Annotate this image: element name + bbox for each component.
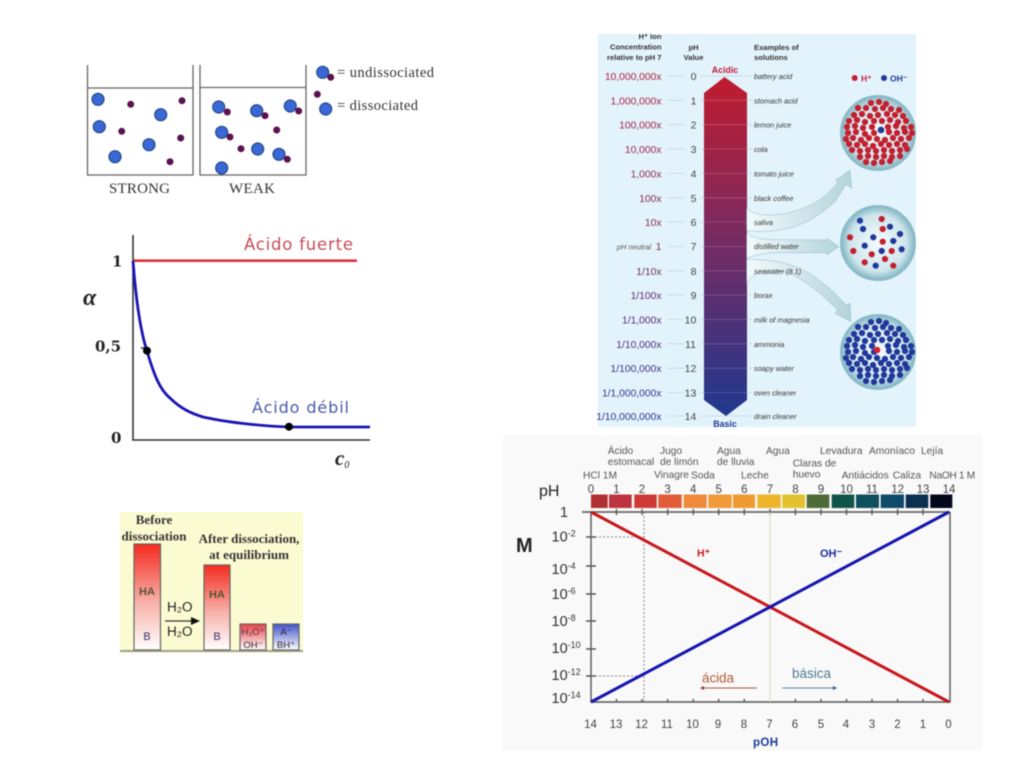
concentration values: 1/10x xyxy=(636,267,662,278)
curve points xyxy=(143,347,293,431)
legend and beaker labels: = dissociated xyxy=(337,98,419,114)
pH values: 5 xyxy=(715,484,722,496)
pH values: 2 xyxy=(639,484,645,496)
substance labels: Antiácidos xyxy=(842,470,889,482)
OH- label: OH⁻ xyxy=(820,548,842,560)
water arrow xyxy=(165,600,200,639)
concentration values: 1/100x xyxy=(631,291,662,302)
substance labels: NaOH 1 M xyxy=(929,470,975,482)
pH colour strip xyxy=(591,494,952,508)
example solutions: milk of magnesia xyxy=(754,316,809,324)
plot frame and ticks xyxy=(582,509,950,702)
concentration labels: 10 xyxy=(552,562,568,578)
pOH values: 3 xyxy=(869,719,875,731)
water arrow: H₂O xyxy=(167,624,192,639)
concentration labels: 10 xyxy=(552,614,568,630)
bar labels: HA xyxy=(139,586,155,598)
headings: dissociation xyxy=(121,529,187,544)
pH axis title: pH xyxy=(539,483,559,500)
concentration values: 10,000x xyxy=(625,145,662,156)
pH arrow bar xyxy=(704,77,747,416)
headings: at equilibrium xyxy=(209,547,289,562)
pH values: 8 xyxy=(691,266,697,278)
pH values: 9 xyxy=(818,484,824,496)
bar labels: BH⁺ xyxy=(277,640,295,651)
acidic label: Acidic xyxy=(712,65,738,75)
concentration values: 1/100,000x xyxy=(611,364,662,375)
sphere: neutral solution xyxy=(840,206,916,280)
pH values: 9 xyxy=(691,290,697,302)
substance labels: huevo xyxy=(793,470,821,480)
panel background xyxy=(120,512,303,653)
concentration values: 100,000x xyxy=(619,121,662,132)
column headers: H⁺ Ion xyxy=(638,32,662,41)
example solutions: lemon juice xyxy=(754,121,791,130)
substance labels: Caliza xyxy=(893,470,921,482)
pH values: 11 xyxy=(866,484,878,496)
arrow: to neutral solution xyxy=(747,233,839,258)
example solutions: ammonia xyxy=(754,340,784,349)
axis labels: 0,5 xyxy=(95,338,121,356)
bar labels: B xyxy=(143,631,151,643)
concentration values: pH neutral xyxy=(616,242,651,252)
example solutions xyxy=(754,72,809,421)
pH values: 3 xyxy=(664,484,671,496)
particles: purple ions xyxy=(118,74,334,165)
column headers xyxy=(607,32,799,62)
concentration axis title: M xyxy=(516,535,533,557)
pOH values: 0 xyxy=(945,719,952,731)
pH values: 3 xyxy=(691,144,697,156)
pOH values: 5 xyxy=(818,719,824,731)
example solutions: drain cleaner xyxy=(754,412,797,421)
leader lines xyxy=(667,76,752,416)
pOH values: 10 xyxy=(686,719,699,731)
pH values xyxy=(685,71,697,423)
concentration labels: -14 xyxy=(568,690,581,700)
pOH values: 11 xyxy=(661,719,673,731)
chart: pH and pOH versus molar concentration xyxy=(503,435,982,750)
headings: After dissociation, xyxy=(199,531,299,546)
strong acid line xyxy=(133,259,357,262)
particles: blue ions xyxy=(92,66,332,174)
legend and beaker labels xyxy=(109,65,435,197)
pOH values: 4 xyxy=(843,719,850,731)
substance labels: Vinagre xyxy=(654,470,689,481)
bar tick lines xyxy=(704,100,747,393)
pH values: 11 xyxy=(685,339,696,351)
axis labels: c xyxy=(335,446,344,470)
pH values: 1 xyxy=(691,95,697,107)
acid region label and arrow: ácida xyxy=(702,671,734,686)
concentration labels: 10 xyxy=(552,530,568,546)
pOH values: 13 xyxy=(610,719,622,731)
substance labels: Leche xyxy=(741,470,769,482)
pH values: 0 xyxy=(691,71,697,83)
pOH values: 12 xyxy=(635,719,648,731)
axis labels: α xyxy=(83,285,97,311)
axis labels: 1 xyxy=(112,253,122,271)
concentration values xyxy=(596,72,662,423)
pOH values: 8 xyxy=(741,719,747,731)
pOH values: 1 xyxy=(920,719,926,731)
chart background xyxy=(503,435,982,750)
substance labels: de limón xyxy=(660,457,699,468)
sphere: basic solution xyxy=(840,314,916,390)
pH values: 12 xyxy=(685,363,696,375)
arrow: to basic solution xyxy=(747,259,851,322)
example solutions: tomato juice xyxy=(754,169,794,178)
concentration labels: -12 xyxy=(568,667,581,677)
pOH values: 9 xyxy=(715,719,721,731)
column headers: Examples of xyxy=(754,43,799,52)
basic region label and arrow: básica xyxy=(792,666,831,681)
pH values: 13 xyxy=(917,484,929,496)
beaker: strong xyxy=(88,65,193,175)
ion legend: OH⁻ xyxy=(890,74,908,84)
concentration values: 1/10,000x xyxy=(616,340,662,351)
baseline xyxy=(120,650,303,652)
substance labels: Amoníaco xyxy=(869,446,915,457)
concentration labels: 10 xyxy=(552,641,568,657)
concentration labels: -8 xyxy=(568,613,576,623)
pOH values: 2 xyxy=(894,719,901,731)
substance labels: estomacal xyxy=(608,457,654,468)
weak acid label: Ácido débil xyxy=(252,398,349,417)
headings xyxy=(121,512,299,562)
sphere: acidic solution xyxy=(840,96,916,170)
ion legend: H⁺ xyxy=(861,74,872,84)
example solutions: battery acid xyxy=(754,72,793,81)
pOH values: 6 xyxy=(792,719,798,731)
panel: pH scale xyxy=(596,32,916,429)
pH values: 5 xyxy=(691,193,697,205)
pOH axis title: pOH xyxy=(753,737,778,749)
bar labels: H₃O⁺ xyxy=(241,627,265,638)
pH values: 0 xyxy=(588,484,594,496)
concentration values: 1,000x xyxy=(631,169,662,180)
bar labels: B xyxy=(213,631,221,643)
concentration labels: 1 xyxy=(560,505,568,521)
chart: degree of dissociation vs concentration xyxy=(83,235,370,471)
substance labels: Jugo xyxy=(660,446,682,457)
column headers: solutions xyxy=(754,53,788,62)
concentration values: 100x xyxy=(639,194,662,205)
pH values: 7 xyxy=(691,241,697,253)
H+ label: H⁺ xyxy=(697,548,711,560)
legend and beaker labels: WEAK xyxy=(229,181,275,197)
guide lines at pH 2 / pH 12 xyxy=(591,512,644,702)
concentration labels: -2 xyxy=(568,529,576,539)
panel background xyxy=(598,34,916,427)
example solutions: cola xyxy=(754,145,768,154)
concentration values: 10x xyxy=(645,218,662,229)
pH values: 10 xyxy=(840,484,853,496)
arrow: to acidic solution xyxy=(747,170,852,232)
substance labels: Soda xyxy=(691,470,715,482)
concentration labels: 10 xyxy=(552,587,568,603)
bar labels: OH⁻ xyxy=(243,640,263,651)
axis labels xyxy=(83,253,349,471)
beaker: weak xyxy=(200,65,306,175)
axis labels: 0 xyxy=(111,429,121,447)
example solutions: seawater (8.1) xyxy=(754,267,802,276)
pH values: 6 xyxy=(691,217,697,229)
OH- line xyxy=(591,512,949,702)
panel: before and after dissociation bars xyxy=(120,512,303,653)
concentration labels xyxy=(552,505,581,707)
concentration labels: 10 xyxy=(552,668,568,684)
example solutions: black coffee xyxy=(754,194,793,203)
pH values: 4 xyxy=(691,168,697,180)
neutral line at pH 7 xyxy=(769,512,771,702)
weak acid curve xyxy=(133,261,370,427)
concentration values: 1,000,000x xyxy=(611,96,662,107)
column headers: pH xyxy=(688,43,699,52)
concentration values: 1 xyxy=(656,242,662,253)
pH values: 4 xyxy=(690,484,697,496)
substance labels: Claras de xyxy=(793,458,837,470)
pH values xyxy=(588,484,956,496)
concentration labels: -6 xyxy=(568,586,576,596)
panel: strong vs weak acid beakers xyxy=(88,65,435,197)
H+ line xyxy=(591,512,949,702)
headings: Before xyxy=(136,512,173,527)
substance labels: Agua xyxy=(766,446,790,457)
column headers: relative to pH 7 xyxy=(607,53,662,62)
acid region label and arrow xyxy=(700,671,757,690)
pOH values xyxy=(584,719,952,731)
pH values: 1 xyxy=(613,484,620,496)
substance labels: HCl 1M xyxy=(583,470,617,482)
axis labels: 0 xyxy=(344,460,349,471)
substance labels xyxy=(583,444,975,482)
pH values: 10 xyxy=(685,314,696,326)
example solutions: soapy water xyxy=(754,364,794,373)
substance labels: Ácido xyxy=(608,444,634,457)
pOH values: 7 xyxy=(766,719,773,731)
pH values: 13 xyxy=(685,388,696,400)
basic label: Basic xyxy=(713,419,737,429)
pH values: 2 xyxy=(691,120,697,132)
concentration values: 1/1,000,000x xyxy=(602,388,662,400)
ion legend xyxy=(852,74,908,84)
substance labels: Agua xyxy=(717,446,741,457)
example solutions: distilled water xyxy=(754,242,799,251)
concentration labels: -10 xyxy=(568,640,581,650)
column headers: Value xyxy=(684,53,703,62)
bar labels: A⁻ xyxy=(280,627,292,638)
pOH values: 14 xyxy=(584,719,597,731)
bar labels: HA xyxy=(209,589,225,601)
basic region label and arrow xyxy=(782,666,837,690)
axes xyxy=(133,235,370,440)
concentration labels: -4 xyxy=(568,561,576,571)
example solutions: saliva xyxy=(754,218,773,227)
example solutions: stomach acid xyxy=(754,96,798,105)
pH values: 12 xyxy=(891,484,904,496)
pH values: 6 xyxy=(741,484,748,496)
pH values: 8 xyxy=(792,484,799,496)
concentration values: 1/1,000x xyxy=(622,316,662,326)
column headers: Concentration xyxy=(610,42,662,52)
substance labels: Levadura xyxy=(820,446,863,457)
pH values: 14 xyxy=(943,484,956,496)
concentration values: 10,000,000x xyxy=(605,72,662,83)
bar labels xyxy=(139,586,295,651)
substance labels: de lluvia xyxy=(717,457,755,468)
example solutions: oven cleaner xyxy=(754,388,797,398)
legend and beaker labels: = undissociated xyxy=(337,65,435,81)
substance labels: Lejía xyxy=(921,446,943,457)
legend and beaker labels: STRONG xyxy=(109,181,170,197)
pH values: 14 xyxy=(685,411,696,423)
strong acid label: Ácido fuerte xyxy=(244,235,353,254)
example solutions: borax xyxy=(754,291,773,300)
concentration labels: 10 xyxy=(552,691,568,707)
bars xyxy=(134,544,299,650)
water arrow: H₂O xyxy=(167,600,192,615)
pH values: 7 xyxy=(767,484,773,496)
concentration values: 1/10,000,000x xyxy=(596,412,662,423)
